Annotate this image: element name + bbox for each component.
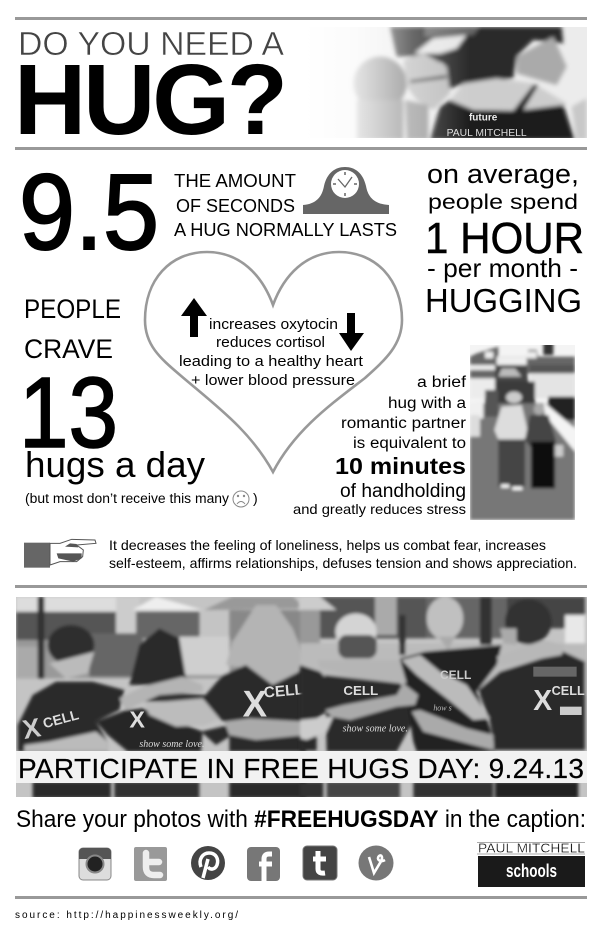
source: source: http://happinessweekly.org/ <box>15 910 238 921</box>
icon: facebook <box>247 847 280 881</box>
stat: 1 hour per month: HUGGING <box>425 282 582 319</box>
share line: Share your photos with #FREEHUGSDAY in the caption: <box>16 806 586 833</box>
left half of the group <box>16 597 306 798</box>
stat: 9.5 seconds <box>19 151 397 272</box>
text: loneliness note: It decreases the feeling of loneliness, helps us combat fear, increases <box>109 537 546 553</box>
heart text and arrows: + lower blood pressure <box>191 372 355 389</box>
right half of the group: CELL <box>552 684 585 698</box>
stat: 9.5 seconds: A HUG NORMALLY LASTS <box>174 220 397 240</box>
logo: Paul Mitchell schools <box>477 840 585 887</box>
photo: hugging women: PAUL MITCHELL <box>447 128 527 139</box>
icons: social media <box>79 846 394 881</box>
right half of the group <box>298 597 587 798</box>
icon: vine <box>358 846 394 880</box>
stat: 13 hugs a day: hugs a day <box>25 444 205 485</box>
stat: 13 hugs a day <box>19 294 258 506</box>
stat: 9.5 seconds: THE AMOUNT <box>174 171 296 191</box>
left half of the group: CELL <box>41 706 81 731</box>
stat: 1 hour per month: on average, <box>427 159 579 189</box>
icon: twitter <box>134 847 167 881</box>
heart text and arrows: leading to a healthy heart <box>179 353 364 370</box>
stat: 1 hour per month: - per month - <box>427 253 578 283</box>
icon: pinterest <box>191 846 225 880</box>
text: loneliness note <box>109 537 577 571</box>
stat: 1 hour per month: 1 HOUR <box>425 214 584 263</box>
stat: 13 hugs a day: 13 <box>19 357 118 469</box>
right half of the group: CELL <box>343 683 378 698</box>
left half of the group: show some love. <box>139 739 204 750</box>
photo: hugging women <box>352 27 587 138</box>
stat: 9.5 seconds: OF SECONDS <box>176 196 295 216</box>
stat: 1 hour per month <box>425 159 584 319</box>
text: romantic partner hug: romantic partner <box>341 415 466 432</box>
title: DO YOU NEED A <box>18 25 284 62</box>
right half of the group: X <box>533 685 552 717</box>
right half of the group: how s <box>433 703 452 712</box>
arrow: up <box>181 298 207 337</box>
icon: sad face <box>233 491 249 507</box>
photo: couple on pier <box>470 340 575 520</box>
icon: mantel clock <box>303 167 389 214</box>
arrow: down <box>339 313 364 351</box>
stat: 13 hugs a day: ) <box>253 490 258 506</box>
text: romantic partner hug: 10 minutes <box>335 453 466 479</box>
stat: 13 hugs a day: PEOPLE <box>24 294 121 324</box>
logo: Paul Mitchell schools: schools <box>506 861 557 881</box>
stat: 13 hugs a day: (but most don’t receive this many <box>25 491 229 506</box>
text: romantic partner hug: of handholding <box>340 481 466 502</box>
logo: Paul Mitchell schools: PAUL MITCHELL <box>478 840 585 856</box>
stat: 13 hugs a day: CRAVE <box>24 334 113 364</box>
photo: hugging women: future <box>469 113 498 124</box>
stat: 9.5 seconds: 9.5 <box>19 151 159 272</box>
right half of the group: show some love. <box>343 724 408 735</box>
left half of the group: X <box>243 684 268 725</box>
icon: tumblr <box>303 846 337 880</box>
photo: group hug <box>16 597 587 798</box>
right half of the group: CELL <box>440 668 471 682</box>
stat: 1 hour per month: people spend <box>428 191 578 214</box>
heart text and arrows: increases oxytocin <box>209 316 338 333</box>
left half of the group: X <box>129 707 145 733</box>
left half of the group: CELL <box>263 681 305 702</box>
icon: pointing hand <box>24 539 96 568</box>
text: loneliness note: self-esteem, affirms relationships, defuses tension and shows appreciation. <box>109 555 577 571</box>
icon: instagram <box>79 848 111 880</box>
text: romantic partner hug: hug with a <box>388 395 466 412</box>
heart text and arrows <box>179 298 364 389</box>
banner text: PARTICIPATE IN FREE HUGS DAY: 9.24.13 <box>18 753 584 784</box>
text: romantic partner hug: and greatly reduces stress <box>293 501 466 517</box>
heart text and arrows: reduces cortisol <box>216 334 325 351</box>
text: romantic partner hug: is equivalent to <box>353 435 466 452</box>
text: romantic partner hug <box>293 374 467 517</box>
title: HUG? <box>14 44 288 156</box>
text: romantic partner hug: a brief <box>417 374 467 391</box>
left half of the group: X <box>20 712 43 745</box>
heart outline <box>145 252 402 472</box>
